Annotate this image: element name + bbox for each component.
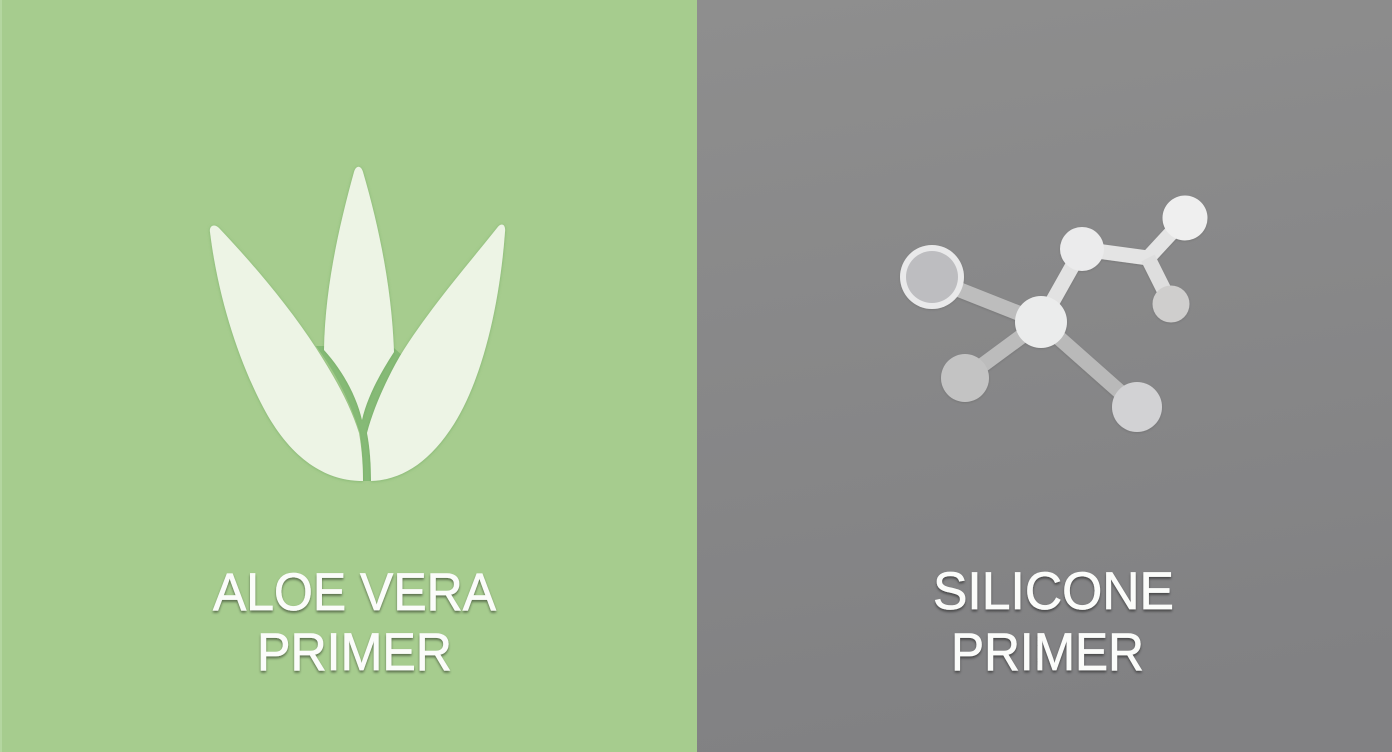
- label: aloe vera primer: [213, 563, 497, 682]
- label: silicone primer: [933, 562, 1174, 682]
- label: aloe vera primer: PRIMER: [257, 623, 452, 682]
- icon: aloe vera leaves: [210, 167, 505, 481]
- icon: silicone molecule: [900, 196, 1208, 432]
- panel: aloe vera: [0, 0, 697, 752]
- label: silicone primer: SILICONE: [933, 562, 1174, 621]
- label: aloe vera primer: ALOE VERA: [213, 563, 497, 622]
- panel: silicone: [697, 0, 1392, 752]
- label: silicone primer: PRIMER: [951, 623, 1144, 682]
